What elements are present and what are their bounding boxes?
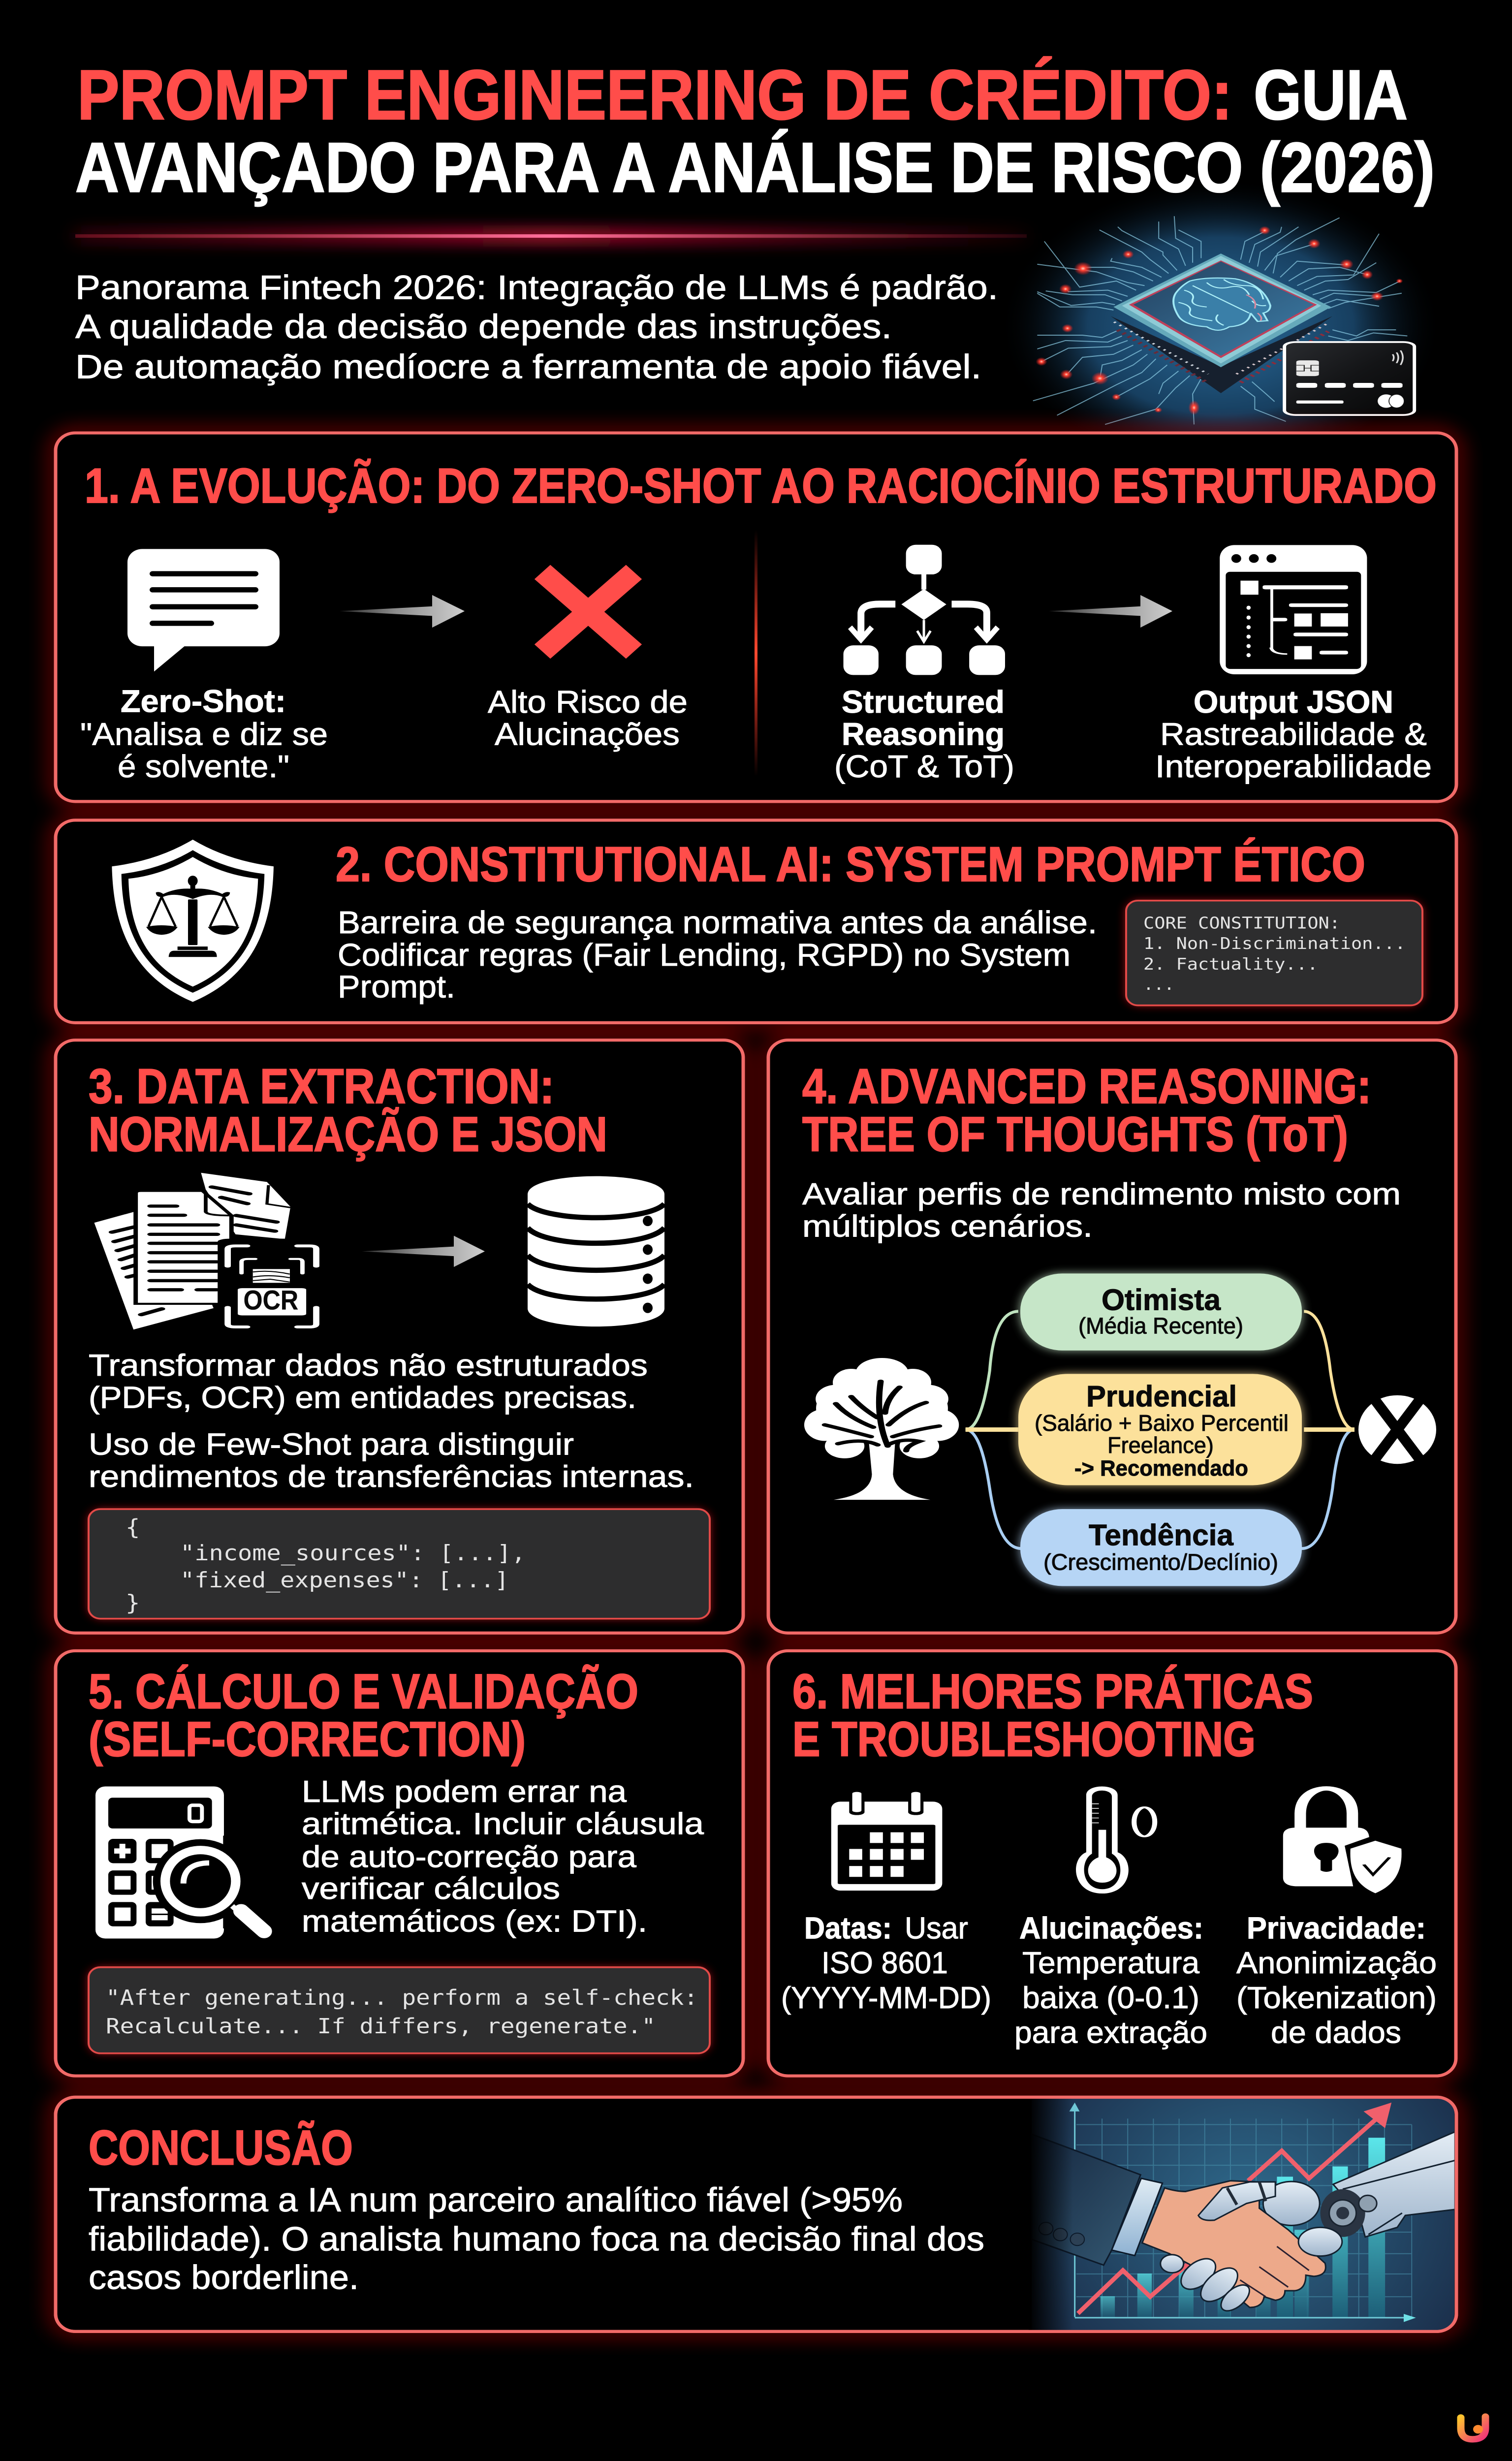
body text: Uso de Few-Shot para distinguir	[89, 1427, 574, 1461]
icon: tree	[804, 1358, 959, 1500]
icon: database	[528, 1176, 664, 1326]
practice: hallucinations: Alucinações:	[1019, 1911, 1203, 1945]
practice: privacy: Privacidade:	[1247, 1911, 1426, 1945]
caption: output JSON: Rastreabilidade &	[1160, 717, 1427, 752]
scenario: Prudencial: Freelance)	[1107, 1433, 1214, 1458]
title: PROMPT ENGINEERING DE CRÉDITO:	[77, 56, 1232, 134]
body text: Barreira de segurança normativa antes da análise.	[338, 906, 1097, 940]
scenario: Prudencial: (Salário + Baixo Percentil	[1035, 1411, 1289, 1436]
title	[75, 56, 1435, 207]
heading 3	[89, 1059, 607, 1162]
icon: red X	[542, 572, 634, 652]
panel 2: constitutional AI	[56, 820, 1456, 1023]
arrow: to risk	[340, 595, 465, 628]
icon: padlock with shield	[1283, 1788, 1402, 1893]
panel 7: conclusion	[56, 2097, 1456, 2332]
body text: (PDFs, OCR) em entidades precisas.	[89, 1380, 636, 1414]
body text: matemáticos (ex: DTI).	[302, 1904, 647, 1938]
heading 5: 5. CÁLCULO E VALIDAÇÃO	[89, 1664, 638, 1719]
body text: Prompt.	[338, 970, 455, 1005]
practice: hallucinations	[1014, 1911, 1207, 2050]
icon: documents and OCR: OCR	[244, 1285, 298, 1316]
illustration: handshake over chart	[56, 2097, 1456, 2332]
panel 4: advanced reasoning	[768, 1040, 1456, 1633]
caption: zero-shot: "Analisa e diz se	[80, 717, 328, 752]
scenario: Tendência: (Crescimento/Declínio)	[1043, 1550, 1278, 1575]
scenario: Otimista: Otimista	[1102, 1283, 1221, 1317]
panel 3: data extraction	[56, 1040, 743, 1633]
practice: hallucinations: para extração	[1014, 2015, 1207, 2050]
panel 1: evolution	[56, 433, 1456, 801]
code box: JSON: }	[126, 1590, 140, 1615]
heading 6: E TROUBLESHOOTING	[792, 1712, 1256, 1767]
practice: dates: Datas:	[804, 1911, 892, 1945]
body text: verificar cálculos	[302, 1871, 560, 1905]
caption: structured reasoning: Reasoning	[842, 717, 1005, 752]
code box: core constitution: ...	[1143, 976, 1174, 994]
heading: conclusion: CONCLUSÃO	[89, 2120, 353, 2175]
body text: Transformar dados não estruturados	[89, 1348, 648, 1382]
body text	[302, 1774, 704, 1938]
heading 3: NORMALIZAÇÃO E JSON	[89, 1107, 607, 1162]
practice: dates	[781, 1911, 991, 2015]
caption: output JSON: Interoperabilidade	[1155, 750, 1432, 784]
arrow: to output	[1049, 595, 1172, 628]
body text: aritmética. Incluir cláusula	[302, 1806, 704, 1841]
body text: LLMs podem errar na	[302, 1774, 627, 1808]
illustration: AI chip with brain and credit card	[999, 178, 1442, 474]
practice: privacy: de dados	[1271, 2015, 1401, 2050]
body text	[89, 2180, 984, 2296]
connectors	[966, 1311, 1354, 1548]
code box: self-check: "After generating... perform a self-check:	[106, 1985, 698, 2010]
icon: chat bubble	[127, 549, 280, 671]
caption: zero-shot: é solvente."	[118, 750, 289, 784]
body text: casos borderline.	[89, 2258, 359, 2296]
scenario: Prudencial: Prudencial	[1086, 1380, 1237, 1413]
code box: JSON: "fixed_expenses": [...]	[180, 1568, 509, 1592]
body text: rendimentos de transferências internas.	[89, 1459, 694, 1493]
code box: core constitution: 1. Non-Discrimination...	[1143, 935, 1406, 953]
practice: dates: (YYYY-MM-DD)	[781, 1981, 991, 2015]
intro text: A qualidade da decisão depende das instruções.	[75, 307, 892, 346]
icon: calendar	[831, 1789, 942, 1891]
caption: high risk: Alucinações	[495, 717, 680, 752]
scenario: Prudencial	[1018, 1374, 1302, 1485]
intro text	[75, 268, 998, 385]
panel 6: best practices	[768, 1651, 1456, 2076]
heading 5: (SELF-CORRECTION)	[89, 1712, 526, 1767]
icon: flowchart	[844, 545, 1005, 675]
scenario: Tendência: Tendência	[1089, 1518, 1234, 1551]
arrow: to database	[362, 1236, 485, 1267]
logo mark	[1461, 2417, 1485, 2439]
body text: fiabilidade). O analista humano foca na decisão final dos	[89, 2220, 984, 2258]
title: GUIA	[1254, 56, 1408, 134]
panel glows	[56, 433, 1456, 2332]
panel 5: calculation and validation	[56, 1651, 743, 2076]
practice: privacy: (Tokenization)	[1236, 1981, 1437, 2015]
caption: zero-shot	[80, 684, 328, 784]
heading 4	[802, 1059, 1371, 1162]
caption: output JSON	[1155, 685, 1432, 784]
code box: JSON: "income_sources": [...],	[180, 1541, 526, 1566]
practice: dates: Usar	[905, 1911, 968, 1945]
caption: output JSON: Output JSON	[1194, 685, 1393, 720]
practice: privacy	[1236, 1911, 1437, 2050]
icon: calculator with magnifier	[95, 1786, 264, 1939]
body text: múltiplos cenários.	[802, 1209, 1093, 1243]
icon: thermometer	[1076, 1786, 1155, 1893]
practice: hallucinations: baixa (0-0.1)	[1022, 1981, 1199, 2015]
icon: documents and OCR	[94, 1173, 328, 1331]
caption: high risk	[488, 685, 688, 752]
body text	[89, 1348, 694, 1493]
caption: structured reasoning: Structured	[842, 685, 1005, 720]
code box: core constitution	[1126, 901, 1422, 1006]
glowing divider line	[75, 230, 1027, 242]
code box: JSON	[89, 1509, 710, 1619]
body text: Avaliar perfis de rendimento misto com	[802, 1177, 1401, 1211]
icon: JSON window	[1220, 545, 1367, 674]
intro text: De automação medíocre a ferramenta de apoio fiável.	[75, 347, 981, 385]
body text: de auto-correção para	[302, 1840, 636, 1874]
caption: high risk: Alto Risco de	[488, 685, 688, 720]
body text: Codificar regras (Fair Lending, RGPD) no System	[338, 938, 1071, 973]
icon: shield with scales	[112, 840, 274, 1002]
code box: JSON: {	[126, 1514, 140, 1540]
code box: core constitution: CORE CONSTITUTION:	[1143, 914, 1340, 933]
icon: credit card	[1285, 342, 1415, 415]
heading 6: 6. MELHORES PRÁTICAS	[792, 1664, 1313, 1719]
caption: structured reasoning	[834, 685, 1014, 784]
caption: zero-shot: Zero-Shot:	[121, 684, 286, 719]
code box: self-check: Recalculate... If differs, regenerate."	[106, 2014, 656, 2038]
vertical divider	[755, 530, 757, 776]
practice: hallucinations: Temperatura	[1022, 1946, 1199, 1980]
intro text: Panorama Fintech 2026: Integração de LLMs é padrão.	[75, 268, 998, 307]
heading 4: TREE OF THOUGHTS (ToT)	[802, 1107, 1348, 1162]
body text: Transforma a IA num parceiro analítico fiável (>95%	[89, 2180, 903, 2219]
body text	[802, 1177, 1401, 1243]
icon: decision circle	[1358, 1393, 1436, 1466]
scenario: Otimista: (Média Recente)	[1078, 1314, 1243, 1339]
heading 3: 3. DATA EXTRACTION:	[89, 1059, 554, 1114]
practice: privacy: Anonimização	[1236, 1946, 1437, 1980]
practice: dates: ISO 8601	[821, 1946, 948, 1980]
heading 5	[89, 1664, 638, 1767]
scenario: Otimista	[1020, 1273, 1302, 1351]
heading 6	[792, 1664, 1313, 1767]
scenario: Tendência	[1020, 1509, 1302, 1586]
body text	[338, 906, 1097, 1005]
scenario: Prudencial: -> Recomendado	[1074, 1456, 1248, 1480]
caption: structured reasoning: (CoT & ToT)	[834, 750, 1014, 784]
code box: core constitution: 2. Factuality...	[1143, 955, 1318, 974]
code box: self-check	[89, 1967, 710, 2053]
